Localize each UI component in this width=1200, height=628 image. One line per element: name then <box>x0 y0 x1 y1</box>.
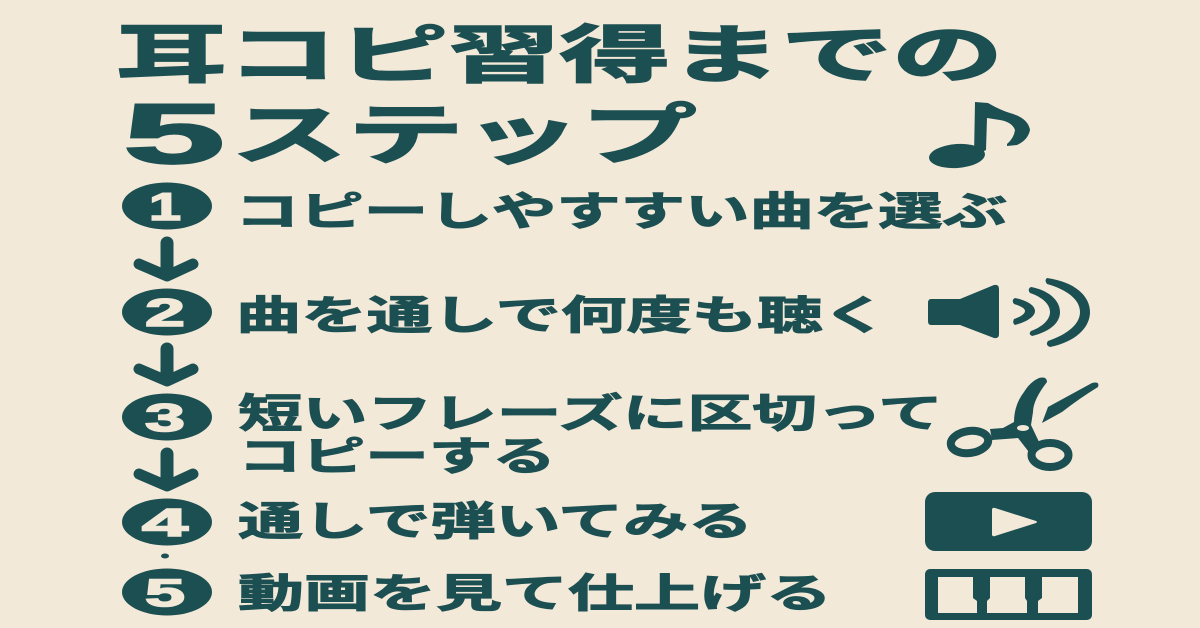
connector dot: step 4 to 5 <box>161 554 169 558</box>
icon: video player <box>925 492 1092 551</box>
step 3 label: コピーする <box>238 435 556 479</box>
step 1 label: コピーしやすすい曲を選ぶ <box>235 190 1007 234</box>
step 5 label: 動画を見て仕上げる <box>238 572 832 616</box>
step 1 number badge: 1 <box>149 186 181 229</box>
step 3 number badge <box>122 394 212 440</box>
step 4 number badge: 4 <box>142 502 189 545</box>
step 1 number badge <box>122 182 212 230</box>
title: 5 <box>123 87 225 182</box>
title: 耳コピ習得までの <box>116 21 1003 91</box>
step 2 number badge <box>122 288 212 336</box>
title: ステップ <box>231 98 697 172</box>
step 3 label <box>238 392 943 479</box>
step 3 number badge: 3 <box>145 397 185 440</box>
step 2 label: 曲を通しで何度も聴く <box>236 294 888 338</box>
icon: scissors <box>949 378 1098 467</box>
arrow: step 1 to 2 <box>139 243 193 276</box>
step 2 number badge: 2 <box>145 292 185 335</box>
title <box>116 21 1003 182</box>
arrow: step 3 to 4 <box>139 454 193 486</box>
arrow: step 2 to 3 <box>139 349 193 381</box>
icon: music note <box>928 102 1030 170</box>
step 4 number badge <box>122 498 212 546</box>
step 4 label: 通しで弾いてみる <box>238 500 753 544</box>
icon: piano keys <box>925 569 1092 620</box>
step 5 number badge: 5 <box>145 572 185 615</box>
step 5 number badge <box>122 568 212 616</box>
step 3 label: 短いフレーズに区切って <box>238 392 943 436</box>
icon: speaker with sound waves <box>928 278 1090 347</box>
